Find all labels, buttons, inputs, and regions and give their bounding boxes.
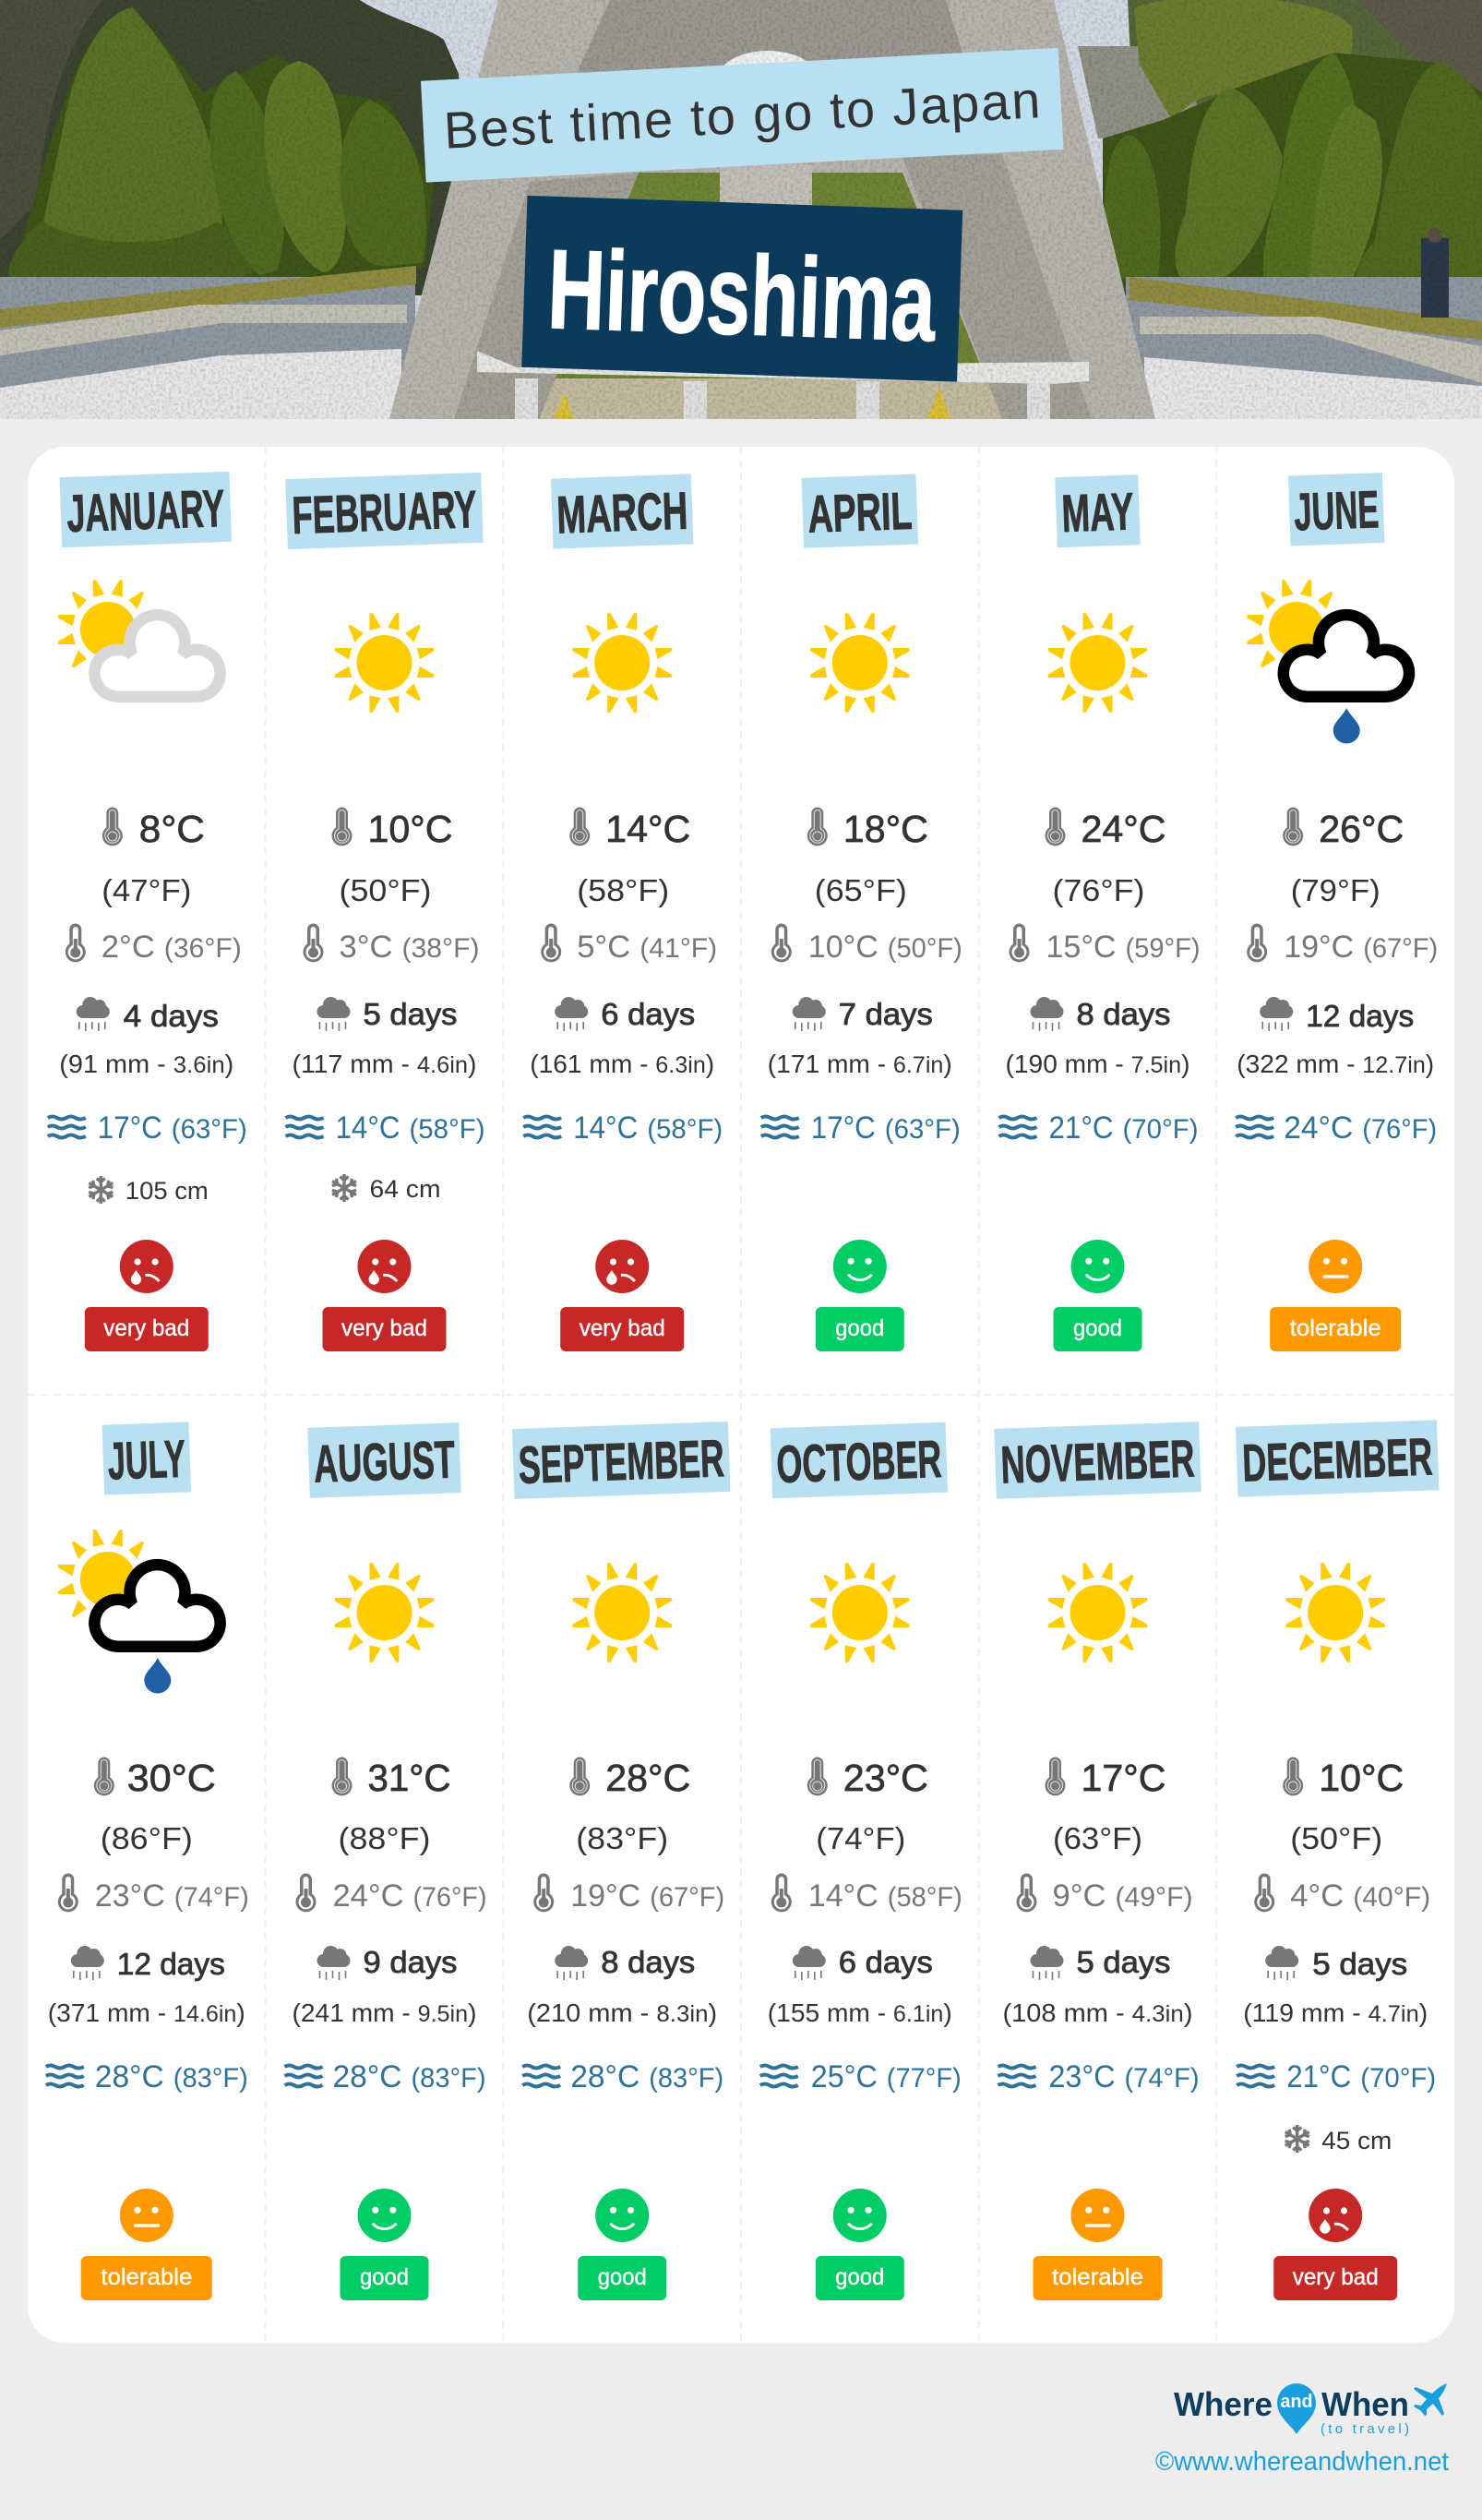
sea temperature [1236, 1110, 1437, 1146]
low temperature [1247, 923, 1438, 965]
rainy days: 6 days [601, 997, 695, 1031]
rating: good: good [835, 1315, 884, 1341]
low temperature: (58°F) [888, 1882, 962, 1913]
rainy days: 5 days [364, 997, 458, 1031]
high temperature: 30°C [127, 1757, 216, 1799]
sea temperature [48, 1110, 247, 1146]
high temperature: 14°C [605, 808, 690, 850]
sea temperature [286, 1110, 485, 1146]
month label: March [551, 474, 693, 549]
high temperature [1283, 807, 1404, 907]
logo: Where and When: When [1321, 2385, 1409, 2423]
low temperature: 9°C [1052, 1878, 1106, 1914]
icon: sun [810, 1563, 910, 1662]
rating: very bad [85, 1240, 209, 1351]
month label: September: SEPTEMBER [518, 1429, 725, 1495]
month label: June [1288, 473, 1384, 546]
icon: map pin [1277, 2383, 1316, 2434]
month label: March: MARCH [556, 482, 688, 545]
high temperature [569, 1757, 690, 1855]
high temperature: 28°C [605, 1757, 690, 1799]
rainy days: (210 mm - 8.3in) [527, 1998, 717, 2027]
low temperature: (67°F) [1363, 933, 1438, 964]
snow depth: 45 cm [1321, 2127, 1392, 2154]
rainy days [292, 1945, 476, 2027]
icon: sun behind black cloud with rain drop [1248, 580, 1409, 744]
low temperature: (38°F) [402, 933, 480, 964]
high temperature: (86°F) [101, 1821, 193, 1855]
sea temperature: (74°F) [1124, 2063, 1200, 2094]
high temperature: 8°C [139, 808, 205, 850]
low temperature [1254, 1874, 1430, 1914]
rainy days: (371 mm - 14.6in) [48, 1998, 245, 2027]
icon: sun [810, 613, 910, 713]
rainy days [1002, 1945, 1192, 2027]
panel: May [998, 474, 1200, 1351]
high temperature [807, 807, 928, 907]
rating: very bad [1273, 2189, 1397, 2300]
low temperature: (59°F) [1126, 933, 1200, 964]
icon: sun [1048, 613, 1147, 713]
icon: sun behind black cloud with rain drop [58, 1530, 221, 1693]
month label: September [512, 1422, 730, 1499]
panel: October [760, 1422, 962, 2300]
low temperature [303, 923, 480, 965]
sea temperature: (63°F) [172, 1114, 247, 1145]
rating: good: good [598, 2264, 647, 2290]
low temperature: (67°F) [650, 1882, 724, 1913]
rainy days: 4 days [124, 999, 219, 1033]
low temperature: 10°C [808, 930, 878, 965]
high temperature: 10°C [367, 808, 452, 850]
rainy days [768, 1945, 952, 2027]
rating: very bad: very bad [103, 1315, 189, 1341]
low temperature: (50°F) [888, 933, 962, 964]
title banner: Hiroshima [546, 226, 938, 365]
high temperature: 26°C [1319, 808, 1404, 850]
rainy days [1006, 997, 1190, 1078]
rainy days [768, 997, 952, 1078]
sea temperature: (63°F) [885, 1114, 961, 1145]
sea temperature [760, 2059, 962, 2094]
rainy days: (322 mm - 12.7in) [1237, 1050, 1434, 1078]
sea temperature: 23°C [1048, 2059, 1115, 2094]
low temperature [541, 923, 717, 965]
rating: tolerable [1034, 2189, 1163, 2300]
high temperature: (50°F) [340, 873, 432, 907]
rating: good [816, 1240, 904, 1351]
icon: sun [335, 1563, 434, 1662]
sea temperature: (58°F) [647, 1114, 723, 1145]
month label: July [102, 1422, 191, 1495]
low temperature: 3°C [340, 930, 392, 965]
sea temperature: (70°F) [1360, 2063, 1436, 2094]
sea temperature [46, 2059, 248, 2094]
month label: May: MAY [1060, 482, 1135, 544]
high temperature: (47°F) [102, 873, 191, 907]
rating: good: good [360, 2264, 409, 2290]
snow depth [330, 1174, 441, 1203]
low temperature: 19°C [1284, 930, 1354, 965]
low temperature [58, 1874, 249, 1914]
panel: January [48, 472, 247, 1351]
rainy days: 8 days [601, 1945, 695, 1979]
panel: September [512, 1422, 730, 2300]
sea temperature: (77°F) [887, 2063, 962, 2094]
panel: April [761, 474, 962, 1351]
high temperature [102, 807, 205, 907]
rainy days: 7 days [839, 997, 933, 1031]
rating: tolerable: tolerable [1052, 2264, 1143, 2290]
sea temperature [998, 2059, 1200, 2094]
rainy days: (241 mm - 9.5in) [292, 1998, 476, 2027]
rating: tolerable [1270, 1240, 1401, 1351]
month label: January: JANUARY [66, 479, 225, 544]
high temperature: 23°C [843, 1757, 928, 1799]
rainy days: 12 days [117, 1947, 225, 1981]
icon: sun [335, 613, 434, 713]
sea temperature: (70°F) [1122, 1114, 1198, 1145]
snow depth [1283, 2125, 1392, 2154]
sea temperature: (76°F) [1362, 1114, 1437, 1145]
low temperature: 19°C [570, 1878, 640, 1914]
high temperature: (50°F) [1290, 1821, 1382, 1855]
sea temperature: 28°C [570, 2059, 639, 2094]
rainy days: (117 mm - 4.6in) [292, 1050, 477, 1078]
snow depth: 105 cm [125, 1177, 209, 1205]
rating: good: good [835, 2264, 884, 2290]
high temperature: (63°F) [1053, 1821, 1142, 1855]
icon: sun [1286, 1563, 1385, 1662]
sea temperature: 24°C [1284, 1110, 1353, 1146]
rainy days [59, 997, 233, 1078]
month label: June: JUNE [1293, 480, 1380, 542]
icon: sun [572, 1563, 672, 1662]
logo: Where and When: Where [1174, 2385, 1273, 2423]
rating: good: good [1073, 1315, 1122, 1341]
sea temperature: 21°C [1048, 1110, 1113, 1146]
rainy days: 9 days [364, 1945, 458, 1979]
month label: January [60, 472, 232, 547]
rainy days: (91 mm - 3.6in) [59, 1050, 233, 1078]
high temperature: 31°C [367, 1757, 450, 1799]
high temperature: (76°F) [1052, 873, 1144, 907]
month label: August [307, 1422, 461, 1498]
panel: August [284, 1422, 487, 2300]
low temperature: (49°F) [1115, 1882, 1193, 1913]
high temperature: (88°F) [338, 1821, 430, 1855]
panel: February [285, 473, 485, 1351]
low temperature: 23°C [95, 1878, 165, 1914]
rating: very bad: very bad [580, 1315, 665, 1341]
title banner [521, 196, 962, 382]
snow depth [87, 1176, 209, 1205]
high temperature: 17°C [1082, 1757, 1166, 1799]
high temperature [332, 807, 452, 907]
low temperature: 4°C [1290, 1878, 1344, 1914]
high temperature: (74°F) [816, 1821, 905, 1855]
rating: tolerable [81, 2189, 212, 2300]
icon: airplane [1414, 2383, 1447, 2416]
rainy days: (161 mm - 6.3in) [530, 1050, 714, 1078]
month label: July: JULY [107, 1430, 186, 1491]
low temperature: 5°C [577, 930, 630, 965]
sea temperature: (83°F) [649, 2063, 723, 2094]
rainy days: 6 days [839, 1945, 933, 1979]
low temperature: (74°F) [174, 1882, 249, 1913]
low temperature [1010, 923, 1200, 965]
icon: sun [572, 613, 672, 713]
sea temperature [522, 2059, 723, 2094]
high temperature: 24°C [1082, 808, 1166, 850]
panel: March [523, 474, 723, 1351]
rainy days: 12 days [1306, 999, 1414, 1033]
rainy days: (119 mm - 4.7in) [1243, 1998, 1428, 2027]
high temperature [94, 1757, 216, 1855]
rainy days: (190 mm - 7.5in) [1006, 1050, 1190, 1078]
low temperature [771, 1874, 962, 1914]
sea temperature: 21°C [1286, 2059, 1351, 2094]
panel: December [1236, 1420, 1439, 2300]
rainy days [1237, 997, 1434, 1078]
month label: February: FEBRUARY [292, 480, 478, 546]
month label: November [994, 1422, 1201, 1499]
low temperature [66, 923, 242, 965]
rating: tolerable: tolerable [101, 2264, 192, 2290]
sea temperature [998, 1110, 1198, 1146]
rainy days: 5 days [1076, 1945, 1170, 1979]
rainy days [530, 997, 714, 1078]
rating: good [1054, 1240, 1142, 1351]
sea temperature: (83°F) [173, 2063, 248, 2094]
sea temperature: 14°C [573, 1110, 638, 1146]
icon: sun [1048, 1563, 1147, 1662]
high temperature [1283, 1757, 1404, 1855]
sea temperature: 28°C [95, 2059, 164, 2094]
month label: October [771, 1422, 948, 1498]
month label: November: NOVEMBER [1000, 1429, 1196, 1495]
sea temperature [761, 1110, 961, 1146]
rating: good [816, 2189, 904, 2300]
rating: good [340, 2189, 428, 2300]
sea temperature: (83°F) [412, 2063, 485, 2094]
rating: good [578, 2189, 666, 2300]
panel: July [46, 1422, 249, 2300]
low temperature [295, 1874, 487, 1914]
sea temperature [1237, 2059, 1436, 2094]
high temperature [807, 1757, 928, 1855]
low temperature: 24°C [332, 1878, 404, 1914]
month label: May [1055, 474, 1141, 547]
high temperature: (83°F) [576, 1821, 668, 1855]
high temperature: (58°F) [577, 873, 669, 907]
sea temperature: 28°C [332, 2059, 402, 2094]
rating: tolerable: tolerable [1290, 1315, 1381, 1341]
sea temperature: 17°C [811, 1110, 876, 1146]
high temperature: (65°F) [815, 873, 907, 907]
logo: Where and When: (to travel) [1321, 2421, 1409, 2437]
low temperature: (40°F) [1353, 1882, 1430, 1913]
sea temperature [284, 2059, 485, 2094]
low temperature [771, 923, 962, 965]
icon: sun behind grey cloud [58, 580, 221, 697]
subtitle banner: Best time to go to Japan [442, 70, 1042, 160]
panel: monthly grid [28, 447, 1454, 2343]
rating: very bad [323, 1240, 447, 1351]
rating: very bad: very bad [1293, 2264, 1379, 2290]
high temperature [569, 807, 690, 907]
month label: April [802, 474, 918, 548]
logo: Where and When: and [1281, 2392, 1312, 2412]
sea temperature: 25°C [811, 2059, 878, 2094]
high temperature [1045, 1757, 1166, 1855]
low temperature: (36°F) [164, 933, 242, 964]
rainy days: (171 mm - 6.7in) [768, 1050, 952, 1078]
rainy days [527, 1945, 717, 2027]
month label: February [285, 473, 484, 549]
month label: October: OCTOBER [775, 1430, 942, 1494]
rainy days: 8 days [1076, 997, 1170, 1031]
rainy days [292, 997, 476, 1078]
high temperature [1045, 807, 1166, 907]
high temperature [332, 1757, 450, 1855]
sea temperature [523, 1110, 723, 1146]
low temperature: 14°C [808, 1878, 878, 1914]
low temperature: 15°C [1046, 930, 1117, 965]
low temperature: (76°F) [413, 1882, 487, 1913]
sea temperature: (58°F) [410, 1114, 485, 1145]
high temperature: 10°C [1319, 1757, 1404, 1799]
snow depth: 64 cm [369, 1175, 441, 1203]
high temperature: 18°C [843, 808, 928, 850]
low temperature [1017, 1874, 1192, 1914]
website credit: ©www.whereandwhen.net [1155, 2447, 1449, 2477]
logo: Where and When [1174, 2383, 1447, 2437]
rating: very bad: very bad [341, 1315, 427, 1341]
subtitle banner [421, 48, 1063, 183]
low temperature: 2°C [102, 930, 155, 965]
low temperature: (41°F) [639, 933, 717, 964]
rainy days [1243, 1946, 1428, 2027]
rainy days: 5 days [1312, 1947, 1407, 1981]
month label: April: APRIL [807, 482, 913, 545]
rainy days: (155 mm - 6.1in) [768, 1998, 952, 2027]
rating: very bad [560, 1240, 684, 1351]
rainy days: (108 mm - 4.3in) [1002, 1998, 1193, 2027]
sea temperature: 14°C [336, 1110, 400, 1146]
month label: August: AUGUST [313, 1430, 456, 1494]
low temperature [533, 1874, 724, 1914]
panel: June [1236, 473, 1438, 1351]
rainy days [48, 1946, 245, 2027]
panel: November [994, 1422, 1201, 2300]
high temperature: (79°F) [1291, 873, 1380, 907]
header photo: Hiroshima memorial cenotaph [0, 0, 1482, 419]
sea temperature: 17°C [98, 1110, 162, 1146]
